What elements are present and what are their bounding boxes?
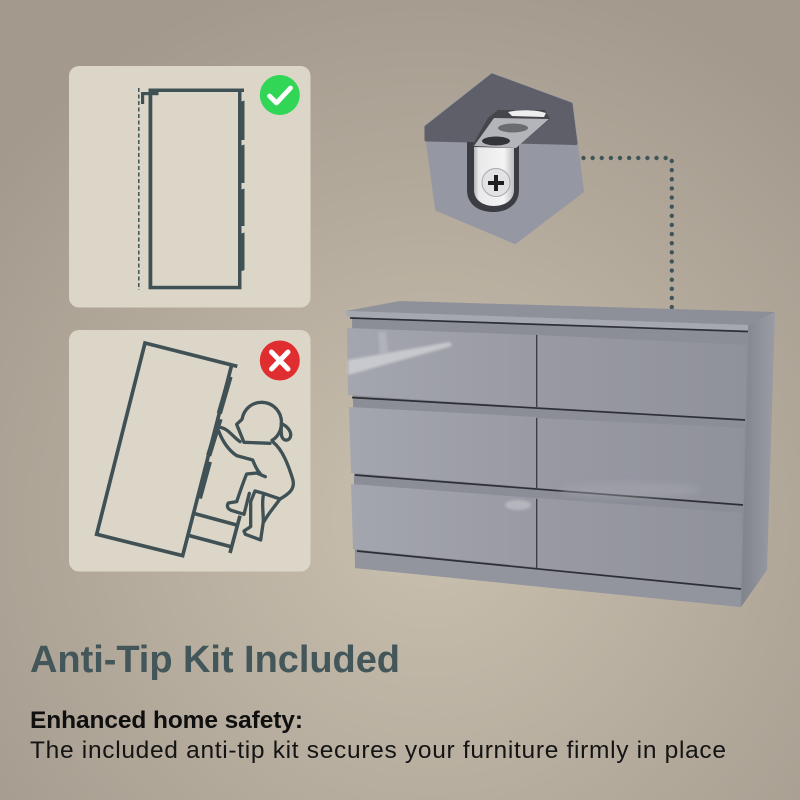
panel: tipping dresser warning — [69, 330, 310, 572]
dresser top surface — [346, 301, 775, 325]
title: Anti-Tip Kit Included — [30, 639, 400, 681]
subheading: Enhanced home safety: — [30, 707, 303, 734]
icon: L bracket with screw — [467, 110, 550, 212]
base plinth — [355, 552, 741, 607]
dresser front carcass — [352, 316, 749, 607]
dresser top edge — [346, 311, 748, 331]
dresser — [346, 301, 775, 607]
panel background: correct — [69, 66, 310, 308]
drawer fronts — [347, 328, 747, 588]
hexagon: upper dark panel — [426, 75, 576, 144]
gap shadows — [350, 318, 748, 589]
drawer gloss reflections — [348, 332, 700, 510]
callout: bracket hexagon — [426, 75, 582, 242]
center drawer split — [536, 335, 538, 568]
icon: green check badge — [260, 75, 300, 115]
icon: anchored dresser side view — [139, 88, 244, 290]
description: The included anti-tip kit secures your furniture firmly in place — [30, 737, 726, 764]
dotted connector — [584, 158, 672, 310]
panel: correct anchored dresser — [69, 66, 310, 308]
hexagon: lower panel — [426, 75, 582, 242]
icon: tipping dresser with climbing child — [97, 343, 293, 556]
panel background: warning — [69, 330, 310, 572]
dresser right side — [741, 312, 775, 607]
icon: red cross badge — [260, 340, 300, 380]
